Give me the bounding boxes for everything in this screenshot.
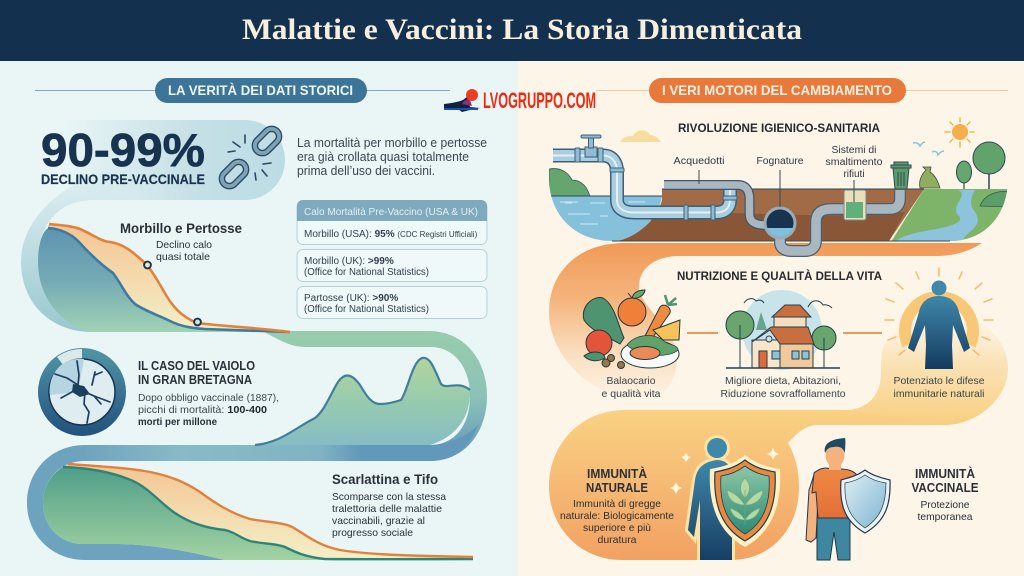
text block: immunità vaccinale: IMMUNITÀ xyxy=(915,466,975,481)
captions: nutrition row xyxy=(602,375,985,400)
ribbon: left arc into first chart xyxy=(21,165,290,332)
water: reservoir xyxy=(545,196,662,241)
icon: cracked smallpox disc xyxy=(44,349,120,430)
heading pill: right xyxy=(596,78,1008,103)
text block: il caso del vaiolo: Dopo obbligo vaccinale (1887), xyxy=(138,392,279,404)
text block: immunità vaccinale: Protezione xyxy=(920,499,970,511)
icon: birds xyxy=(913,142,944,155)
heading: rivoluzione igienico-sanitaria: RIVOLUZIONE IGIENICO-SANITARIA xyxy=(678,121,880,135)
text block: immunità naturale: naturale: Biologicamente xyxy=(560,510,674,522)
soil xyxy=(618,189,924,241)
heading pill: right: I VERI MOTORI DEL CAMBIAMENTO xyxy=(662,82,892,98)
heading pill: left: LA VERITÀ DEI DATI STORICI xyxy=(168,82,353,98)
table: calo mortalità: Morbillo (UK): >99% xyxy=(304,256,394,267)
text block: immunità naturale: Immunità di gregge xyxy=(573,498,661,510)
title banner: Malattie e Vaccini: La Storia Dimenticata xyxy=(242,13,802,46)
text block: scarlattina e tifo: vaccinabili, grazie al xyxy=(332,515,425,527)
illustration: sanitation cross-section xyxy=(545,135,1012,251)
table: calo mortalità: Calo Mortalità Pre-Vaccino (USA & UK) xyxy=(304,207,478,218)
ribbon: lower-left arc xyxy=(27,445,225,560)
text block: scarlattina e tifo: Scarlattina e Tifo xyxy=(332,471,438,487)
text block: immunità vaccinale: VACCINALE xyxy=(912,481,978,495)
tap xyxy=(575,135,737,220)
water highlights xyxy=(560,202,645,224)
stat: 90-99%: 90-99% xyxy=(41,124,205,176)
connector: house to body xyxy=(843,332,882,334)
text block: il caso del vaiolo: picchi di mortalità: 100-400 xyxy=(138,404,267,416)
text block: scarlattina e tifo xyxy=(332,471,446,539)
ribbon: orange sweep around nutrition section xyxy=(549,243,982,402)
captions: nutrition row: Potenziato le difese xyxy=(894,375,985,387)
leader lines xyxy=(699,170,854,207)
icon: small tree xyxy=(956,161,972,189)
labels: infrastructure: smaltimento xyxy=(826,157,883,168)
text block: immunità naturale: IMMUNITÀ xyxy=(587,466,647,481)
icon: food group xyxy=(583,290,680,368)
pipes xyxy=(553,156,730,212)
text block: scarlattina e tifo: progresso sociale xyxy=(332,527,413,539)
text block: scarlattina e tifo: Scomparse con la stessa xyxy=(332,491,446,503)
sewer tunnel xyxy=(765,208,795,238)
table: calo mortalità: Partosse (UK): >90% xyxy=(304,293,398,304)
title banner xyxy=(0,0,1024,61)
text block: il caso del vaiolo: morti per millone xyxy=(138,416,217,428)
text block: immunità naturale: NATURALE xyxy=(586,481,648,495)
captions: nutrition row: immunitarie naturali xyxy=(894,388,984,400)
ribbon: lower blob natural immunity xyxy=(549,410,945,560)
text block: immunità naturale xyxy=(560,466,674,546)
text block: il caso del vaiolo: IL CASO DEL VAIOLO xyxy=(138,359,255,373)
labels: infrastructure: Fognature xyxy=(756,156,804,167)
text block: il caso del vaiolo: IN GRAN BRETAGNA xyxy=(138,373,252,387)
ribbon: lower band xyxy=(85,425,478,461)
land: left hill xyxy=(549,169,590,197)
watermark logo: LVOGRUPPO.COM xyxy=(483,88,596,113)
captions: nutrition row: Balaocario xyxy=(606,375,656,387)
text block: intro: La mortalità per morbillo e pertosse xyxy=(297,135,487,150)
panel: i veri motori del cambiamento xyxy=(545,78,1012,565)
icon: vaccine immunity figure with shield xyxy=(806,438,890,560)
heading pill: left xyxy=(35,78,450,103)
text block: immunità naturale: superiore e più xyxy=(583,522,651,534)
land: right bank xyxy=(892,189,1008,241)
labels: infrastructure: Acquedotti xyxy=(674,156,724,167)
captions: nutrition row: Riduzione sovraffollamento xyxy=(720,388,846,400)
watermark logo xyxy=(444,88,596,113)
captions: nutrition row: e qualità vita xyxy=(602,388,661,400)
table: calo mortalità: (Office for National Statistics) xyxy=(304,304,429,315)
icon: sun xyxy=(945,118,974,147)
text block: scarlattina e tifo: tralettoria delle malattie xyxy=(332,503,442,515)
icon: house xyxy=(726,290,840,370)
text block: il caso del vaiolo xyxy=(138,359,279,428)
background: right panel xyxy=(518,0,1024,576)
label: morbillo e pertosse: Declino calo xyxy=(156,239,212,251)
icon: large tree xyxy=(973,142,1005,189)
connector: food to house xyxy=(687,332,718,334)
labels: infrastructure: Sistemi di xyxy=(832,145,876,156)
table: calo mortalità xyxy=(297,200,487,318)
text block: immunità naturale: duratura xyxy=(598,534,637,546)
table: calo mortalità: Morbillo (USA): 95% (CDC Registri Ufficiali) xyxy=(304,229,478,240)
text block: intro: prima dell’uso dei vaccini. xyxy=(297,163,435,178)
icon: broken chain xyxy=(219,126,282,189)
ribbon: yellow sweep on right xyxy=(740,313,1008,425)
panel: la verità dei dati storici xyxy=(21,78,487,560)
chart: scarlattina e tifo decline xyxy=(43,464,473,560)
icon: natural immunity figure with shield xyxy=(670,435,780,565)
icon: radiant body xyxy=(885,268,993,369)
chart: vaiolo mortality peaks xyxy=(255,358,470,445)
labels: infrastructure xyxy=(674,145,883,180)
text block: immunità vaccinale xyxy=(912,466,978,523)
text block: intro: era già crollata quasi totalmente xyxy=(297,149,469,164)
label: morbillo e pertosse xyxy=(120,220,242,263)
ribbon: bend to smallpox chart xyxy=(85,331,487,461)
icon: trash bin xyxy=(891,162,911,189)
background: left panel xyxy=(0,0,518,576)
text block: immunità vaccinale: temporanea xyxy=(918,511,973,523)
heading: nutrizione e qualità della vita: NUTRIZIONE E QUALITÀ DELLA VITA xyxy=(677,268,882,283)
ribbon: top capsule xyxy=(60,120,285,200)
chart: morbillo e pertosse decline xyxy=(38,224,290,332)
label: morbillo e pertosse: quasi totale xyxy=(156,251,210,263)
icon: cloud xyxy=(620,130,661,142)
stat: 90-99%: DECLINO PRE-VACCINALE xyxy=(41,171,205,187)
waste filter box xyxy=(844,190,866,220)
icon: waste bag xyxy=(920,167,940,188)
table: calo mortalità: (Office for National Statistics) xyxy=(304,267,429,278)
captions: nutrition row: Migliore dieta, Abitazioni, xyxy=(725,375,841,387)
text block: intro xyxy=(297,135,487,178)
labels: infrastructure: rifiuti xyxy=(843,169,865,180)
label: morbillo e pertosse: Morbillo e Pertosse xyxy=(120,220,242,236)
